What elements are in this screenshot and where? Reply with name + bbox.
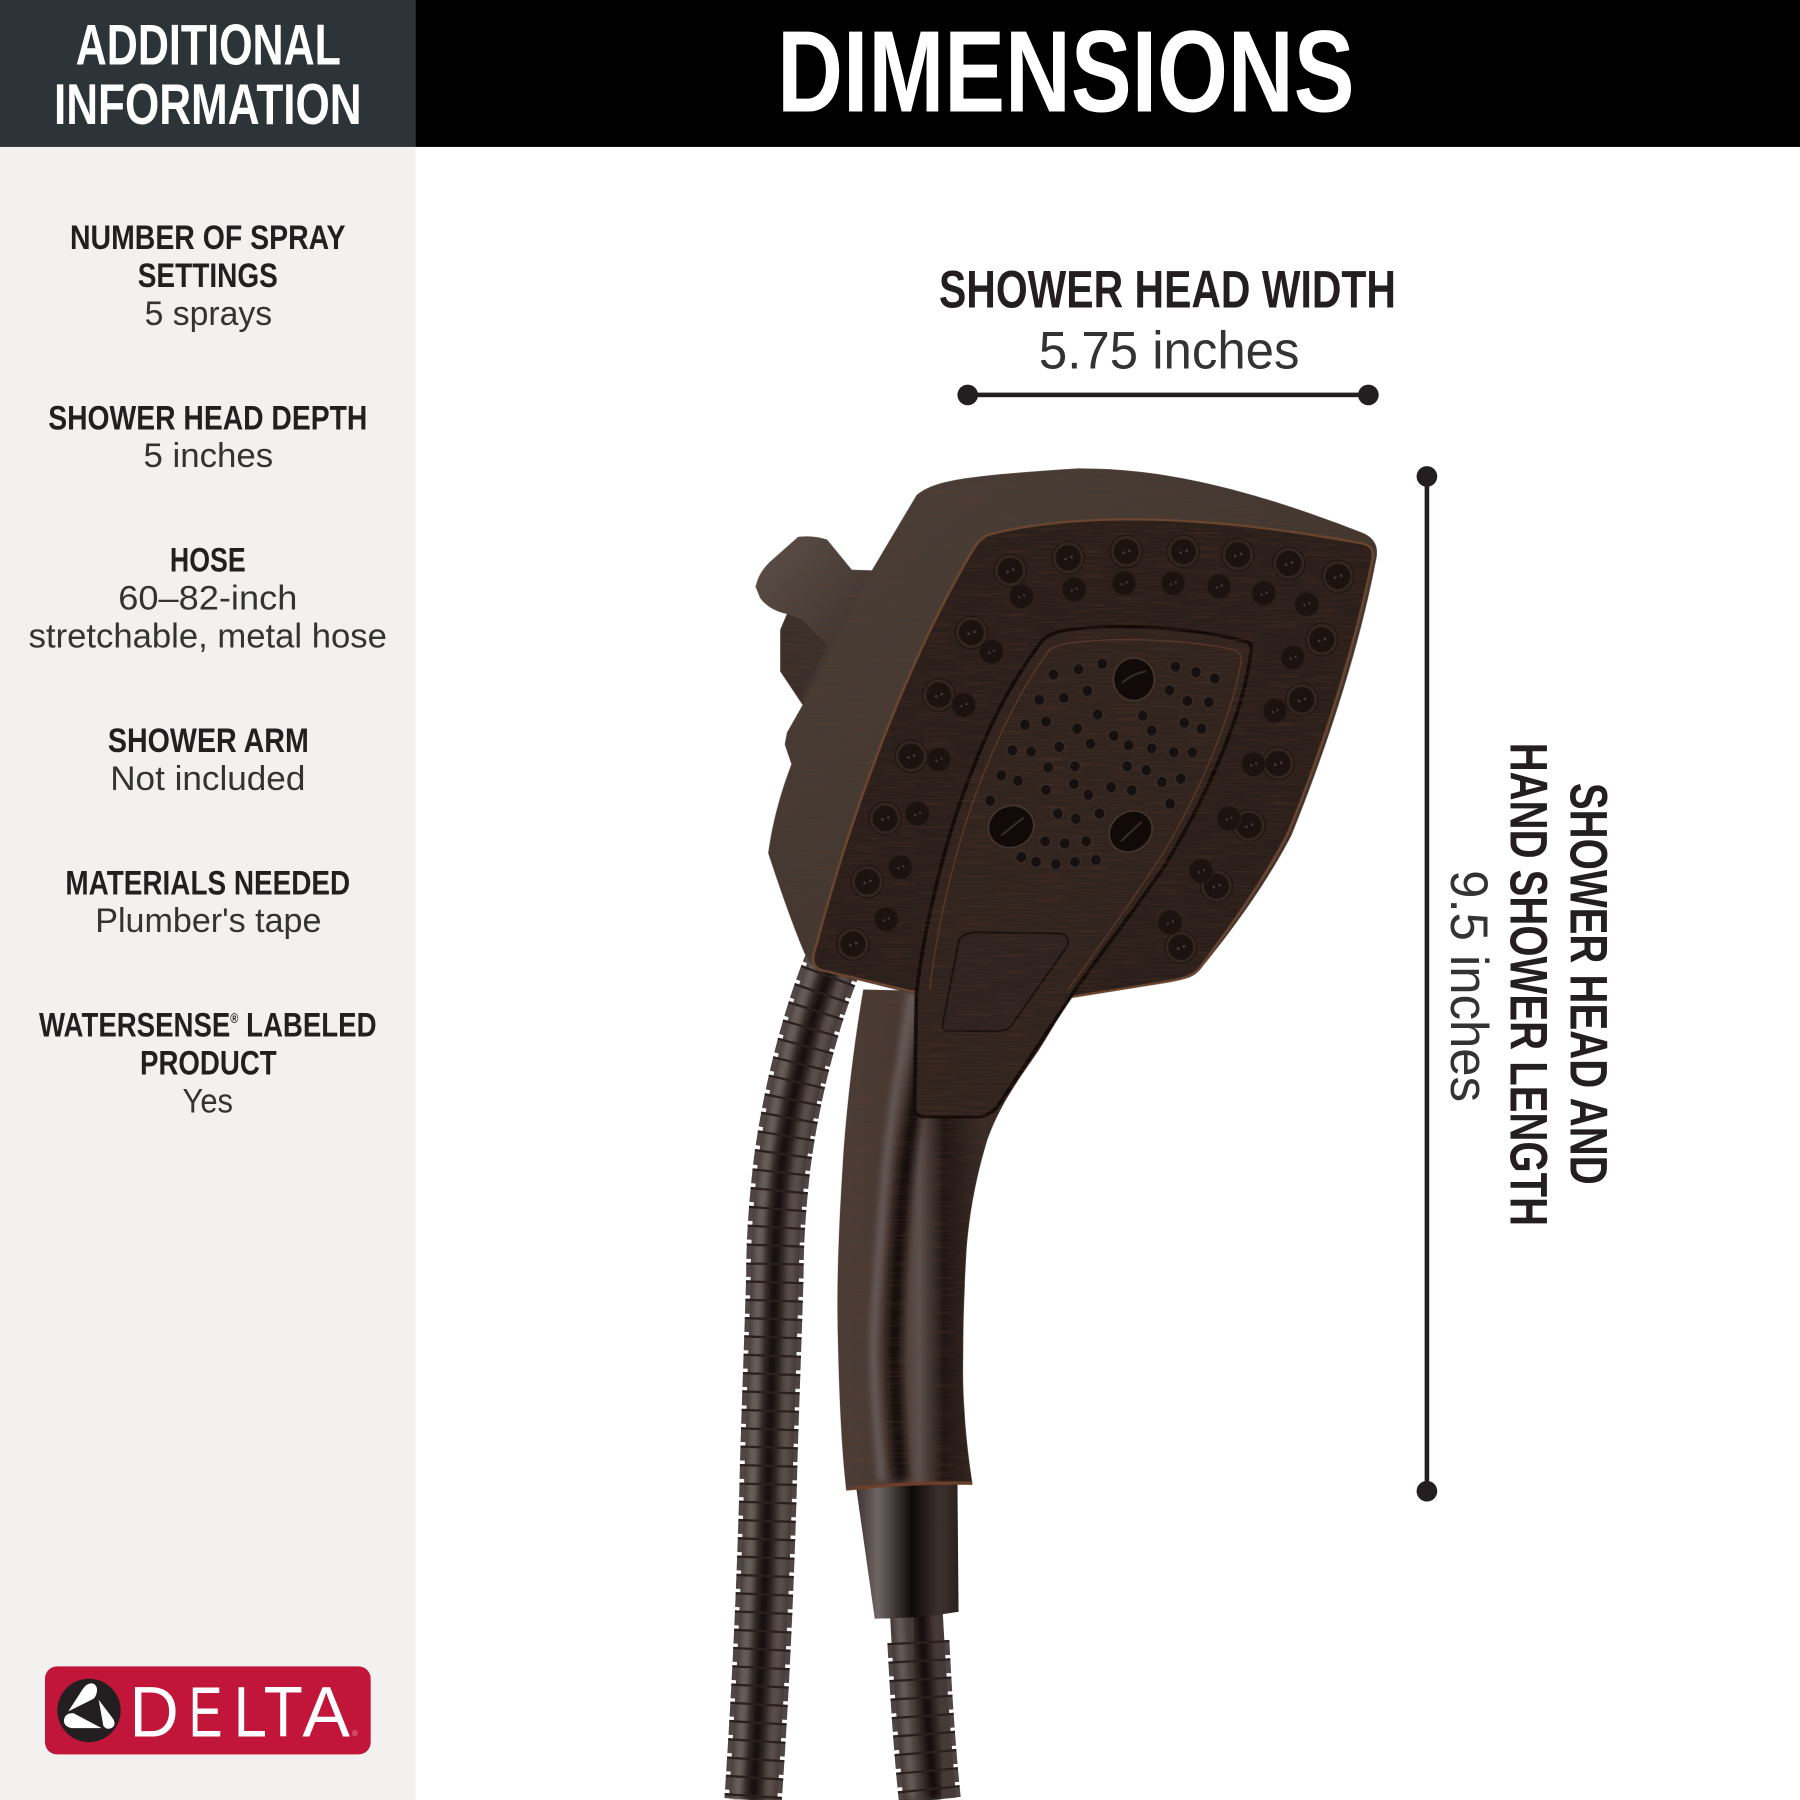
spec: number of spray settings: [70, 219, 346, 333]
label: shower head width: SHOWER HEAD WIDTH: [939, 261, 1396, 320]
label: shower head and hand shower length: SHOWER HEAD AND: [1558, 783, 1617, 1185]
head face plate: [813, 519, 1373, 997]
spec: watersense labeled product: ®: [230, 1011, 238, 1026]
arrow: length measure line: [1417, 466, 1437, 1502]
text block: specifications list: [29, 219, 387, 1120]
spec: watersense labeled product: LABELED: [238, 1007, 377, 1045]
label: shower head and hand shower length: HAND SHOWER LENGTH: [1499, 743, 1558, 1226]
spec: number of spray settings: 5 sprays: [145, 295, 272, 333]
spec: materials needed: [65, 864, 350, 940]
spec: watersense labeled product: Yes: [183, 1082, 233, 1120]
heading: additional information: INFORMATION: [54, 73, 362, 137]
spec: watersense labeled product: PRODUCT: [140, 1044, 277, 1082]
spec: shower head depth: SHOWER HEAD DEPTH: [48, 399, 367, 437]
spec: number of spray settings: SETTINGS: [138, 257, 278, 295]
value: 9.5 inches: 9.5 inches: [1439, 870, 1498, 1102]
spec: hose: HOSE: [170, 542, 246, 580]
hose: left: [737, 941, 859, 1800]
width dimension: [939, 261, 1396, 405]
nozzles: [837, 535, 1354, 963]
collar: [855, 1475, 959, 1619]
spec: watersense labeled product: [39, 1007, 377, 1120]
hose: lower: [899, 1607, 934, 1800]
handle face raised panel: [914, 627, 1251, 1117]
spec: shower arm: [108, 722, 309, 798]
spec: shower arm: Not included: [110, 760, 305, 798]
spec: hose: [29, 542, 387, 655]
panel: additional information header: [0, 0, 416, 147]
label: shower head and hand shower length: [1499, 743, 1617, 1226]
panel: dimensions header: [416, 0, 1800, 147]
nozzles: inner field: [984, 657, 1221, 871]
logo: delta: ®: [352, 1729, 358, 1738]
heading: dimensions: DIMENSIONS: [777, 6, 1355, 136]
panel: sidebar background: [0, 147, 416, 1800]
spec: hose: stretchable, metal hose: [29, 617, 387, 655]
head back body: [768, 468, 1377, 997]
head assembly: [756, 468, 1377, 1117]
handle: [837, 990, 1073, 1489]
logo: delta: D: [129, 1672, 179, 1752]
value: 5.75 inches: 5.75 inches: [1039, 321, 1299, 380]
spec: materials needed: MATERIALS NEEDED: [65, 864, 350, 902]
logo: delta: [45, 1666, 371, 1754]
product: shower head and hose: [737, 468, 1377, 1800]
heading: additional information: ADDITIONAL: [76, 13, 341, 77]
spec: materials needed: Plumber's tape: [95, 902, 321, 940]
heading: additional information: [54, 13, 362, 137]
logo: delta: E: [189, 1673, 222, 1753]
connector: [756, 536, 908, 717]
length dimension: [1417, 466, 1617, 1502]
head body, brushed finish: [756, 468, 1377, 1489]
spec: number of spray settings: NUMBER OF SPRAY: [70, 219, 346, 257]
logo: delta: A: [302, 1672, 350, 1752]
spec: shower head depth: [48, 399, 367, 475]
spec: watersense labeled product: WATERSENSE: [39, 1007, 277, 1045]
spec: shower arm: SHOWER ARM: [108, 722, 309, 760]
logo: delta: L: [234, 1671, 267, 1752]
spec: shower head depth: 5 inches: [143, 437, 273, 475]
button panel: [943, 932, 1068, 1031]
nozzles: outer ring: [837, 535, 1354, 963]
spec: hose: 60–82-inch: [118, 580, 297, 618]
nozzles: large jets: [980, 658, 1161, 859]
arrow: width measure line: [957, 385, 1379, 405]
logo: delta: T: [264, 1673, 303, 1752]
